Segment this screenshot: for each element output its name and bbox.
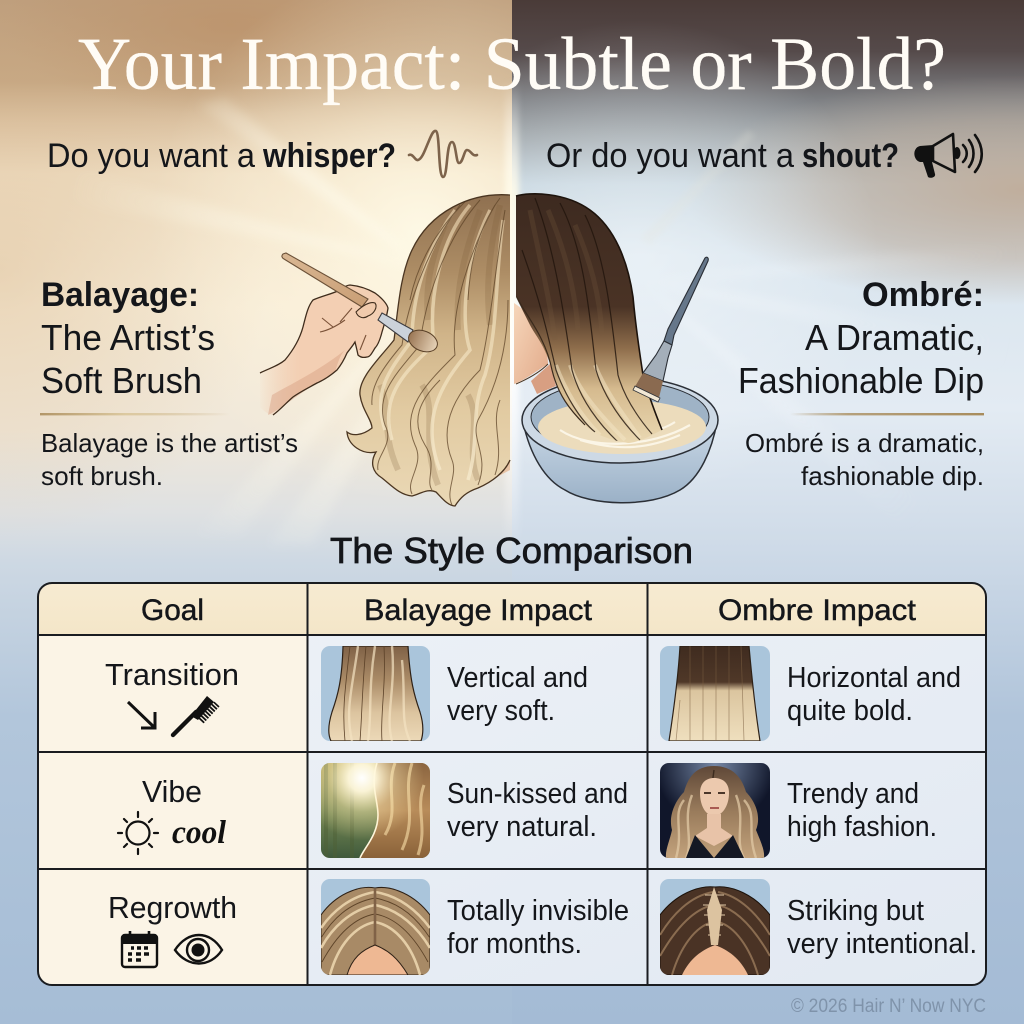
text: ombre vibe bbox=[787, 778, 937, 843]
text: ombre vibe: Trendy and bbox=[787, 778, 919, 810]
comparison table bbox=[38, 583, 986, 985]
row label: transition bbox=[105, 657, 239, 735]
illustration: balayage wavy hair bbox=[347, 195, 510, 506]
icon: sun bbox=[118, 812, 158, 854]
text: balayage description: Balayage is the artist’s bbox=[41, 428, 298, 458]
subtitle: whisper bbox=[47, 137, 396, 175]
text: ombre regrowth: Striking but bbox=[787, 895, 924, 927]
panel: balayage heading: Soft Brush bbox=[41, 360, 202, 401]
thumbnail: sun-kissed vibe bbox=[321, 763, 430, 858]
panel: balayage heading bbox=[41, 276, 215, 401]
row label: regrowth bbox=[108, 890, 237, 967]
text: balayage vibe: very natural. bbox=[447, 811, 597, 843]
text: balayage description bbox=[41, 428, 298, 491]
row label: vibe bbox=[118, 774, 227, 854]
title: Your Impact: Subtle or Bold? bbox=[78, 23, 946, 106]
thumbnail: ombre transition bbox=[660, 646, 770, 741]
thumbnail: ombre regrowth bbox=[660, 879, 770, 975]
thumbnail: balayage transition bbox=[321, 646, 430, 741]
thumbnail: high fashion model bbox=[660, 763, 770, 858]
table header row: Balayage Impact bbox=[364, 594, 593, 627]
text: ombre description bbox=[745, 428, 984, 491]
panel: ombre heading: Ombré: bbox=[862, 276, 984, 314]
text: balayage transition: very soft. bbox=[447, 695, 555, 727]
icon: arrow bbox=[128, 702, 155, 728]
illustration: bowl with dip bbox=[522, 377, 718, 503]
illustration: ombre hair with face bbox=[514, 194, 662, 443]
footer copyright: © 2026 Hair N’ Now NYC bbox=[791, 996, 986, 1017]
text: ombre description: fashionable dip. bbox=[801, 461, 984, 491]
subtitle: whisper: Do you want a bbox=[47, 137, 255, 175]
panel: ombre heading: Fashionable Dip bbox=[738, 360, 984, 401]
text: balayage regrowth: for months. bbox=[447, 928, 582, 960]
table header row bbox=[38, 583, 986, 635]
text: ombre transition: Horizontal and bbox=[787, 662, 961, 694]
goal column bbox=[38, 635, 307, 985]
icon: calendar bbox=[122, 931, 157, 967]
thumbnail: balayage regrowth bbox=[321, 879, 430, 975]
illustration: hand holding soft brush bbox=[260, 253, 441, 415]
text: ombre description: Ombré is a dramatic, bbox=[745, 428, 984, 458]
divider: balayage bbox=[40, 413, 230, 415]
table header row: Goal bbox=[141, 594, 204, 627]
illustration: tint brush bbox=[633, 257, 708, 402]
text: ombre regrowth bbox=[787, 895, 977, 960]
table background bbox=[38, 583, 986, 985]
icon: sound wave bbox=[409, 131, 477, 177]
row label: vibe: Vibe bbox=[142, 774, 202, 809]
text: ombre transition: quite bold. bbox=[787, 695, 913, 727]
text: ombre vibe: high fashion. bbox=[787, 811, 937, 843]
text: ombre transition bbox=[787, 662, 961, 727]
subtitle: whisper: whisper? bbox=[262, 137, 396, 175]
text: balayage vibe: Sun-kissed and bbox=[447, 778, 628, 810]
panel: balayage heading: The Artist’s bbox=[41, 317, 215, 358]
background: split warm and cool panels bbox=[0, 0, 1024, 818]
table grid lines bbox=[38, 583, 986, 985]
icon: cool script word: cool bbox=[172, 815, 227, 851]
icon: megaphone bbox=[914, 134, 982, 178]
panel: ombre heading: A Dramatic, bbox=[805, 317, 984, 358]
table header row: Ombre Impact bbox=[718, 594, 917, 627]
icon: eye bbox=[175, 935, 222, 964]
subtitle: shout: shout? bbox=[802, 137, 899, 175]
divider: ombre bbox=[790, 413, 984, 415]
icon: comb bbox=[173, 696, 217, 735]
text: balayage regrowth bbox=[447, 895, 629, 960]
subtitle: shout: Or do you want a bbox=[546, 137, 794, 175]
text: balayage regrowth: Totally invisible bbox=[447, 895, 629, 927]
row label: transition: Transition bbox=[105, 657, 239, 692]
row label: regrowth: Regrowth bbox=[108, 890, 237, 925]
text: balayage transition: Vertical and bbox=[447, 662, 588, 694]
text: balayage transition bbox=[447, 662, 588, 727]
heading: style comparison: The Style Comparison bbox=[330, 530, 693, 571]
text: ombre regrowth: very intentional. bbox=[787, 928, 977, 960]
panel: balayage heading: Balayage: bbox=[41, 276, 199, 314]
text: balayage description: soft brush. bbox=[41, 461, 163, 491]
panel: ombre heading bbox=[738, 276, 984, 401]
text: balayage vibe bbox=[447, 778, 628, 843]
